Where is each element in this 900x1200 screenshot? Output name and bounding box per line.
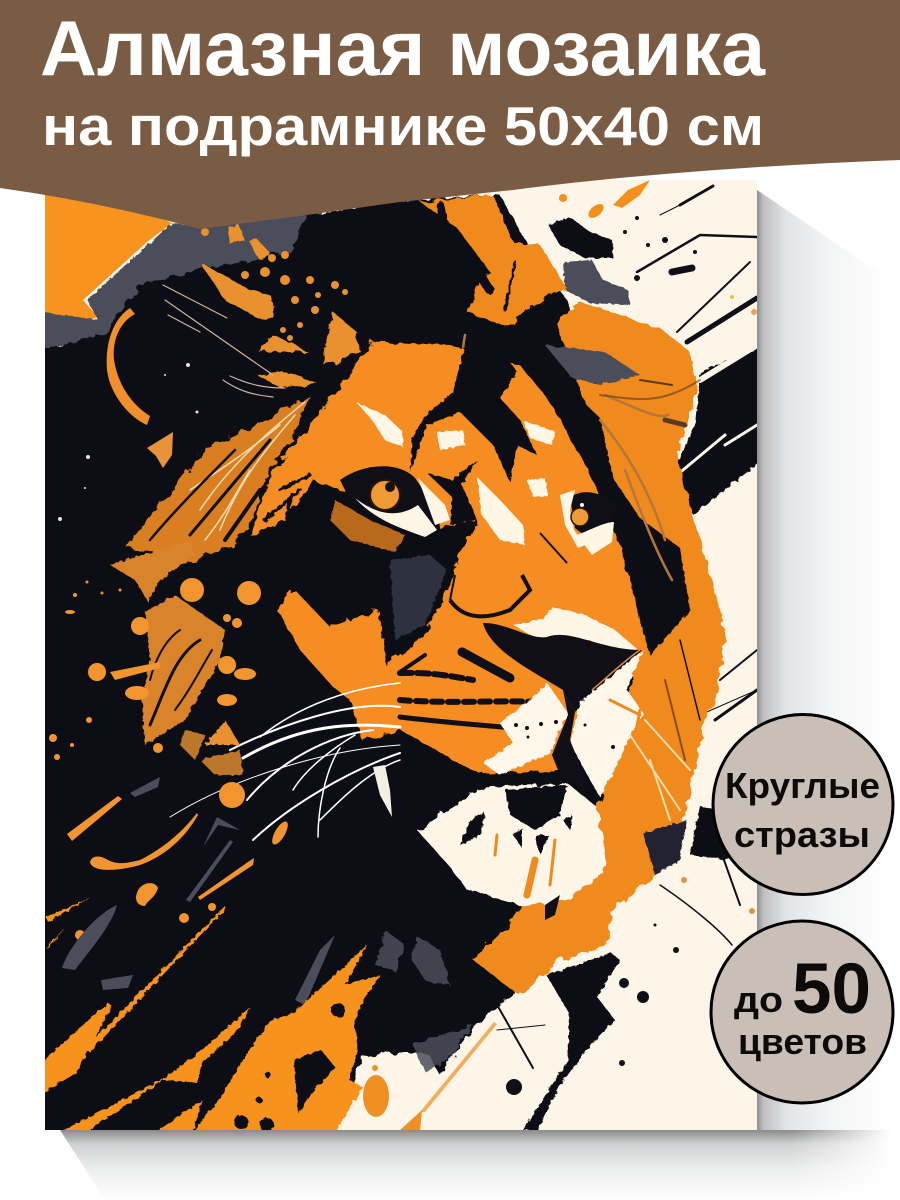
- mane dark patches: [643, 820, 687, 875]
- orange speckle patch near whiskers: [180, 720, 243, 775]
- beard orange streaks: [495, 835, 555, 895]
- grey speckled fur: [375, 930, 473, 1072]
- nose bridge highlights: [513, 607, 638, 650]
- top-left orange block: [45, 195, 172, 320]
- right ear dark streaks: [600, 380, 700, 760]
- bottom-left orange strokes: [40, 898, 381, 1132]
- badge: round rhinestones: Круглые: [725, 765, 880, 806]
- lower lip dark: [492, 774, 494, 775]
- ear arc: [107, 308, 150, 425]
- left mane: [127, 395, 310, 560]
- grey smear under splat: [563, 260, 630, 305]
- beard black flecks: [460, 785, 572, 855]
- ink dots: [506, 216, 697, 1095]
- left eye: [340, 466, 450, 537]
- nose bridge dark claws: [427, 460, 477, 525]
- nose: [483, 623, 642, 712]
- badge: round rhinestones: стразы: [734, 814, 870, 855]
- badge: up to 50 colours: до: [734, 979, 783, 1020]
- lion face orange: [250, 342, 642, 773]
- fine cream lines on ear: [163, 285, 285, 397]
- left orange splatter: [49, 578, 291, 940]
- right ear and right mane orange: [473, 302, 725, 996]
- subtitle: на подрамнике 50х40 см: [42, 95, 764, 157]
- badge: up to 50 colours: 50: [792, 950, 871, 1029]
- grey background band: [45, 213, 322, 348]
- top mane orange: [420, 195, 567, 328]
- badge: up to 50 colours: [711, 921, 893, 1103]
- white specks: [58, 363, 198, 521]
- whiskers: [170, 683, 400, 840]
- black holes in orange: [234, 1003, 345, 1132]
- muzzle white: [483, 683, 568, 775]
- bottom orange dabs on cream: [363, 1022, 497, 1132]
- top-right orange accents: [559, 180, 757, 914]
- dark mask over left cheek: [240, 480, 478, 665]
- small ear tuft: [147, 432, 173, 468]
- lower left mane tufts: [110, 540, 225, 745]
- right eye: [560, 490, 617, 555]
- muzzle stripes: [400, 652, 538, 728]
- brown strands over wedge: [463, 330, 672, 580]
- dark strokes left of face: [262, 472, 312, 524]
- black wedge between face and ear: [505, 325, 690, 655]
- upper mane orange speckle: [200, 225, 358, 388]
- ink streaks: [496, 186, 757, 1068]
- black tufts inside top mane: [440, 205, 515, 310]
- right-side black splashes: [523, 217, 760, 1130]
- header banner: [0, 0, 900, 229]
- badge: up to 50 colours: цветов: [738, 1021, 867, 1062]
- black mass of lion and background: [40, 195, 650, 1132]
- badge: round rhinestones: [713, 714, 893, 894]
- lion artwork on canvas: [40, 180, 760, 1132]
- canvas shadow: [60, 190, 891, 1200]
- cream slashes in the black splash: [677, 345, 757, 475]
- orange streaks on right muzzle: [608, 698, 642, 728]
- title: Алмазная мозаика: [40, 4, 766, 92]
- beard white: [417, 783, 607, 907]
- forehead dark centre: [410, 318, 537, 482]
- forehead white flecks: [357, 403, 555, 545]
- grey dust: [62, 777, 335, 1005]
